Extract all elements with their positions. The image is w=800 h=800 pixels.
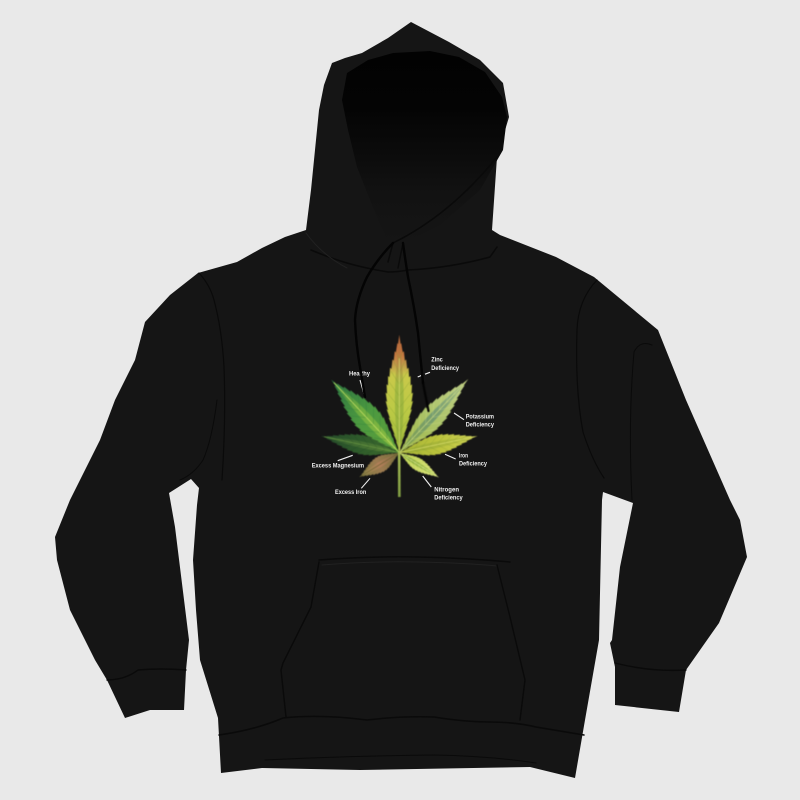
leaflet: potassium deficiency [391,371,477,461]
hem rib [219,716,584,763]
label: Excess Magnesium: Excess Magnesium [312,462,364,469]
label: Potassium Deficiency: Deficiency [466,421,494,428]
label: Iron Deficiency: Iron [459,453,468,460]
leaflet: excess magnesium [319,426,401,463]
drawstring tip over leaflet [423,383,428,411]
right drawstring [403,243,423,383]
leaflet: iron deficiency [397,426,480,463]
label: Zinc Deficiency: Deficiency [431,365,459,372]
label: Iron Deficiency: Deficiency [459,461,487,468]
label: Nitrogen Deficiency: Nitrogen [434,487,459,494]
hood opening [342,51,507,242]
drawcord neck knot [388,157,497,268]
label: Potassium Deficiency: Potassium [466,413,494,420]
label: Nitrogen Deficiency: Deficiency [434,495,463,502]
cannabis leaf [319,335,480,497]
pocket [281,557,525,720]
leaflet: zinc deficiency [386,335,413,453]
label: Excess Iron: Excess Iron [335,489,366,496]
label: Healthy: Healthy [349,371,370,378]
callout labels [312,357,494,502]
neck rib and seams [180,233,652,500]
stem [398,452,401,497]
callout lines [338,372,464,488]
label: Zinc Deficiency: Zinc [431,357,443,364]
leaflet: healthy [321,370,410,462]
left drawstring [355,243,393,397]
left cuff [107,669,186,680]
leaflet: excess iron [355,446,404,484]
right cuff [615,663,686,670]
leaflet: nitrogen deficiency [396,447,443,483]
